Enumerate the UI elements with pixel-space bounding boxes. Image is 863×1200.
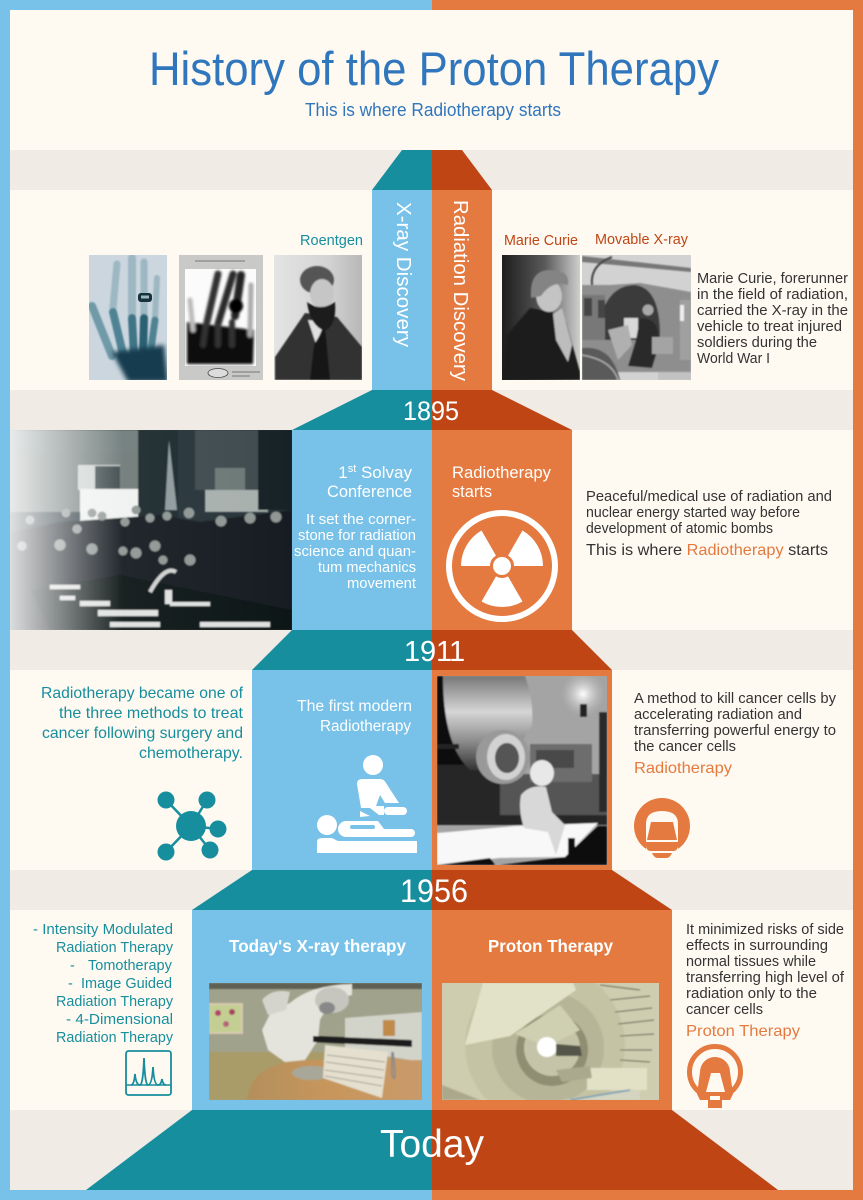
text: method to kill cancer cells: accelerating radiation and [634,707,802,723]
text: proton therapy description: radiation only to the [686,986,817,1002]
text: method to kill cancer cells: transferring powerful energy to [634,723,836,739]
list: x-ray therapy types: - [68,976,77,992]
text: proton therapy description: effects in surrounding [686,938,828,954]
icon: radiation symbol [449,513,555,619]
photo: proton therapy gantry [442,983,659,1100]
text: peaceful use of radiation [586,489,832,537]
text: Marie Curie description: Marie Curie, forerunner [697,271,848,287]
text: 1st Solvay Conference heading: 1 [338,463,348,482]
heading: Today: Today [380,1123,484,1166]
list: x-ray therapy types: - 4-Dimensional [66,1012,173,1028]
text: Solvay description: tum mechanics [318,559,416,576]
text: Solvay description [294,511,417,592]
list: x-ray therapy types [33,922,174,1046]
list: x-ray therapy types: Radiation Therapy [56,940,174,956]
list: x-ray therapy types: - [70,958,79,974]
text: 1st Solvay Conference heading [327,463,412,501]
text: This is where Radiotherapy starts: This is where Radiotherapy starts [586,542,828,559]
text: 1st Solvay Conference heading: Solvay [356,463,412,482]
text: Marie Curie description: in the field of radiation, [697,287,848,303]
label: Marie Curie: Marie Curie [504,233,578,249]
icon: spectrum chart [126,1051,171,1095]
title: History of the Proton Therapy [149,42,719,95]
photo: first x-ray print [179,255,263,380]
photo: x-ray of hand [89,255,168,382]
text: Radiotherapy starts [452,463,551,501]
text: three methods [41,685,244,762]
text: three methods: Radiotherapy became one of [41,685,244,702]
text: peaceful use of radiation: Peaceful/medical use of radiation and [586,489,832,505]
list: x-ray therapy types: Radiation Therapy [56,1030,174,1046]
text: proton therapy description: normal tissues while [686,954,816,970]
photo: modern x-ray therapy room [209,983,422,1100]
text: method to kill cancer cells: A method to kill cancer cells by [634,691,837,707]
text: three methods: cancer following surgery and [42,725,243,742]
list: x-ray therapy types: Image Guided [81,976,172,992]
list: x-ray therapy types: - Intensity Modulated [33,922,173,938]
text: The first modern Radiotherapy: Radiotherapy [320,718,411,735]
text: Marie Curie description: World War I [697,351,770,367]
text: peaceful use of radiation: development of atomic bombs [586,521,773,537]
text: proton therapy description [686,922,845,1018]
text: Marie Curie description [697,271,848,367]
text: Marie Curie description: soldiers during the [697,335,817,351]
list: x-ray therapy types: Tomotherapy [88,958,173,974]
label: Roentgen: Roentgen [300,233,363,249]
label: Radiotherapy: Radiotherapy [634,760,732,777]
text: 1st Solvay Conference heading: st [348,463,356,475]
text: proton therapy description: transferring high level of [686,970,845,986]
icon: molecule network [158,792,226,860]
text: The first modern Radiotherapy [297,698,412,735]
photo: 1st Solvay Conference [10,430,292,630]
heading: Proton Therapy: Proton Therapy [488,936,613,956]
text: 1st Solvay Conference heading: Conference [327,482,412,501]
list: x-ray therapy types: Radiation Therapy [56,994,174,1010]
text: Solvay description: stone for radiation [298,527,416,544]
text: Radiotherapy starts: starts [452,482,492,501]
photo: Marie Curie [502,255,580,380]
text: Marie Curie description: carried the X-ray in the [697,303,848,319]
vertical label: Radiation Discovery: Radiation Discovery [449,200,471,381]
photo: child under early linear accelerator [437,672,607,865]
icon: therapist treating patient [317,755,417,853]
text: Solvay description: movement [347,575,417,592]
year 1895: 1895 [403,396,459,426]
icon: gantry scanner outline [690,1046,740,1108]
text: Radiotherapy starts: Radiotherapy [452,463,551,482]
text: The first modern Radiotherapy: The first modern [297,698,412,715]
vertical label: X-ray Discovery: X-ray Discovery [392,202,414,347]
text: method to kill cancer cells: the cancer cells [634,739,736,755]
central stepped tower [86,150,778,1190]
text: Solvay description: science and quan- [294,543,416,560]
label: Movable X-ray: Movable X-ray [595,232,689,248]
subtitle: This is where Radiotherapy starts [305,100,561,120]
photo: movable x-ray vehicle [582,255,691,380]
text: three methods: chemotherapy. [139,745,243,762]
text: proton therapy description: It minimized risks of side [686,922,844,938]
text: Marie Curie description: vehicle to treat injured [697,319,842,335]
year 1911: 1911 [404,636,465,668]
text: peaceful use of radiation: nuclear energy started way before [586,505,800,521]
label: Proton Therapy: Proton Therapy [686,1023,800,1040]
text: three methods: the three methods to treat [59,705,244,722]
icon: CT scanner solid [634,798,690,858]
photo: Roentgen portrait [274,255,362,380]
year 1956: 1956 [400,873,468,909]
text: Solvay description: It set the corner- [306,511,416,528]
text: proton therapy description: cancer cells [686,1002,763,1018]
heading: Today's X-ray therapy: Today's X-ray therapy [229,936,406,956]
text: method to kill cancer cells [634,691,837,755]
